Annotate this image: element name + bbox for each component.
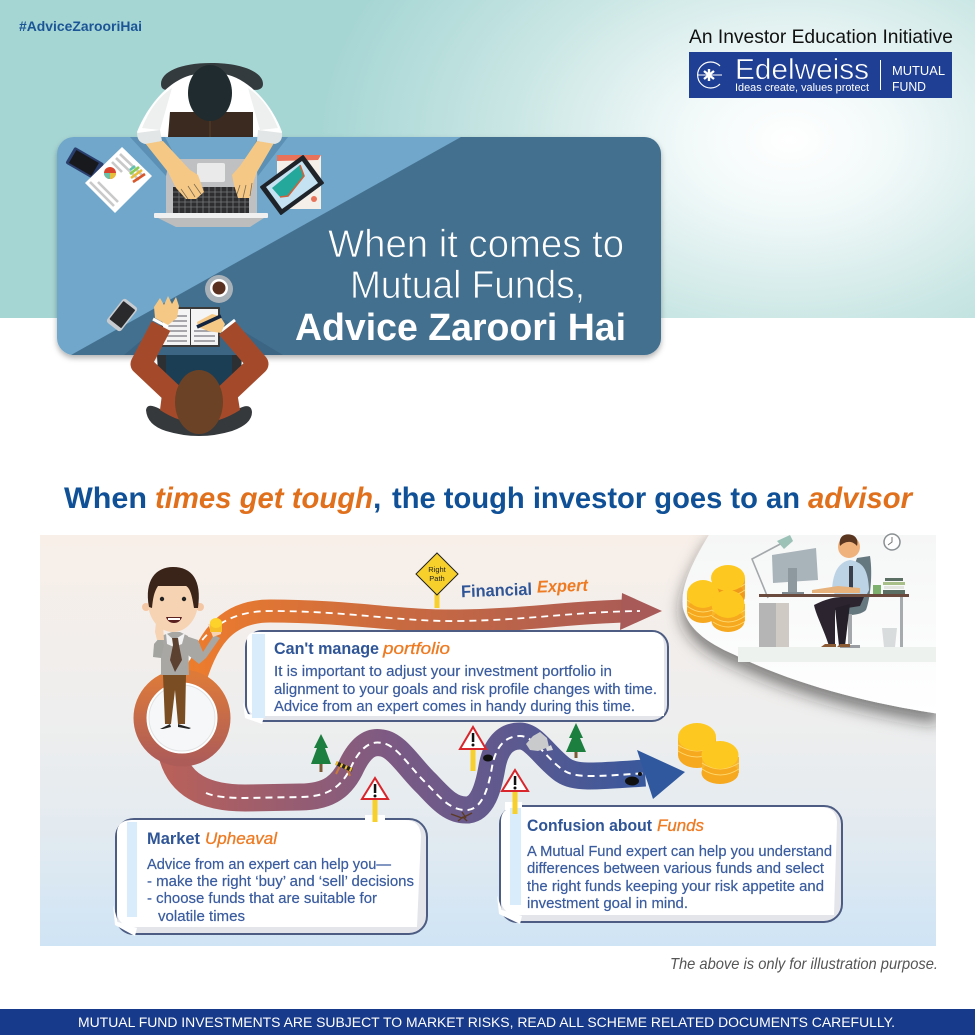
tree right [566, 723, 586, 758]
card heading: portfolio [382, 639, 450, 658]
logo block [689, 26, 953, 98]
desk dark diagonal [71, 137, 661, 355]
hero title [295, 223, 626, 349]
hero title: Mutual Funds, [350, 264, 585, 307]
road sign: Right Path: Right [428, 565, 447, 574]
card heading: Funds [657, 816, 704, 835]
disclaimer note: The above is only for illustration purpose. [670, 956, 938, 973]
hashtag: #AdviceZarooriHai [19, 18, 142, 34]
road crack [451, 812, 472, 821]
monitor [772, 548, 818, 594]
office chair [836, 556, 871, 615]
card body: It is important to adjust your investment portfolio in [274, 664, 612, 680]
card heading [274, 639, 450, 658]
arms [141, 326, 258, 398]
initiative line: An Investor Education Initiative [689, 26, 953, 48]
card body [527, 844, 832, 912]
illustration: coffee cup [205, 275, 233, 303]
card body [147, 857, 414, 925]
logo mark [698, 62, 722, 88]
card body: differences between various funds and select [527, 861, 824, 877]
collar and tie [166, 633, 185, 647]
card heading: Upheaval [205, 829, 278, 848]
card heading: Can't manage [274, 639, 379, 658]
books and cup [873, 578, 905, 594]
illustration: notebook [124, 307, 283, 355]
logo wordmark: Edelweiss [735, 54, 869, 86]
card body: - choose funds that are suitable for [147, 891, 377, 907]
road: upper road with arrow [189, 593, 662, 690]
potholes [483, 754, 642, 786]
logo panel [689, 52, 952, 98]
card heading: Confusion about [527, 816, 652, 835]
footer text: MUTUAL FUND INVESTMENTS ARE SUBJECT TO MARKET RISKS, READ ALL SCHEME RELATED DOCUMENTS CAREFULLY. [78, 1014, 895, 1030]
section heading: times get tough [155, 482, 373, 515]
top teal background [0, 0, 975, 318]
footer bar [0, 1009, 975, 1035]
section heading: When [64, 482, 147, 515]
illustration: bottom person [141, 296, 258, 436]
wall clock [884, 534, 900, 550]
section heading: , [373, 482, 381, 515]
road sign: Right Path [416, 553, 458, 608]
label: Financial Expert: Expert [537, 576, 589, 597]
tree left [311, 734, 331, 772]
road: lower winding road with arrow [172, 736, 685, 810]
illustration: advisor at desk [738, 534, 936, 662]
illustration: top person arms and head [130, 65, 288, 199]
warning sign: market upheaval [362, 778, 388, 822]
illustration: person at top of desk, chair and torso [137, 63, 282, 140]
torso [161, 632, 189, 675]
card body: investment goal in mind. [527, 896, 688, 912]
warning sign: middle [460, 727, 486, 771]
section heading [64, 482, 914, 515]
panel: blue desk [57, 137, 661, 355]
card heading [147, 829, 278, 848]
hands [154, 296, 179, 325]
card body: Advice from an expert comes in handy during this time. [274, 699, 635, 715]
legs [163, 675, 186, 724]
label: Financial Expert: Financial [461, 580, 532, 601]
card body [274, 664, 657, 715]
card body: A Mutual Fund expert can help you understand [527, 844, 832, 860]
desk and cabinet [759, 594, 909, 597]
torso [160, 386, 240, 423]
panel: journey illustration [40, 535, 936, 946]
hero title: When it comes to [328, 223, 624, 266]
warning sign: confusion [502, 770, 528, 814]
illustration: coin stacks near blue arrow [678, 723, 739, 784]
illustration: tablet and paper [261, 155, 323, 214]
head [142, 603, 150, 611]
card body: alignment to your goals and risk profile changes with time. [274, 682, 657, 698]
illustration: coin stacks near advisor [687, 565, 745, 632]
card heading: Market [147, 829, 200, 848]
start circle [140, 676, 224, 760]
illustration: smartphone [106, 298, 138, 332]
card body: the right funds keeping your risk appetite and [527, 879, 824, 895]
illustration: phone on desk [65, 147, 104, 180]
card: Can't manage portfolio [243, 631, 668, 724]
card: Market Upheaval [113, 815, 427, 936]
road sign: Right Path: Path [429, 574, 445, 583]
hero title: Advice Zaroori Hai [295, 307, 626, 349]
logo divider and fund name [880, 60, 945, 94]
section heading: advisor [808, 482, 914, 515]
card: Confusion about Funds [497, 802, 842, 924]
logo tagline: Ideas create, values protect [735, 82, 869, 94]
gold coin [208, 622, 222, 637]
illustration: investor character [142, 567, 222, 729]
waste bin [882, 628, 897, 647]
hand on cheek [155, 622, 164, 640]
card body: - make the right ‘buy’ and ‘sell’ decisions [147, 874, 414, 890]
rocks on road [526, 732, 553, 751]
illustration: laptop [154, 159, 268, 227]
card body: volatile times [158, 909, 245, 925]
advisor figure [812, 534, 869, 647]
logo divider and fund name: FUND [892, 80, 926, 94]
desk lamp [752, 535, 793, 598]
logo divider and fund name: MUTUAL [892, 64, 945, 78]
label: Financial Expert [461, 576, 590, 601]
page curl corner [682, 530, 940, 714]
road barrier [336, 763, 352, 776]
section heading: the tough investor goes to an [392, 482, 800, 515]
illustration: report sheet [85, 147, 152, 213]
card body: Advice from an expert can help you— [147, 857, 391, 873]
